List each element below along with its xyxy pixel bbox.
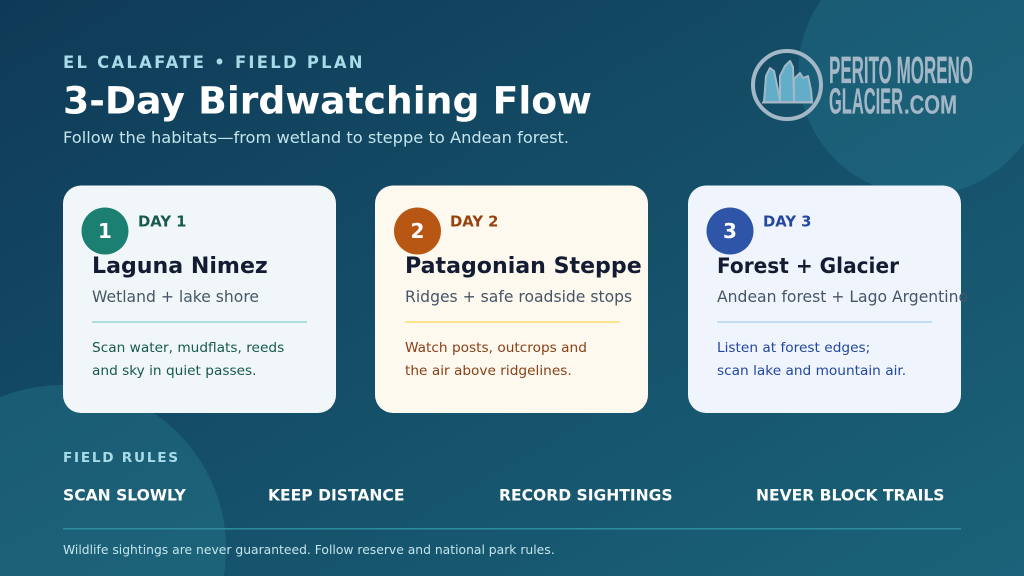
card body: Scan water, mudflats, reeds	[92, 340, 284, 356]
card subtitle: Ridges + safe roadside stops	[405, 288, 632, 306]
footer note: Wildlife sightings are never guaranteed. Follow reserve and national park rules.	[63, 543, 555, 557]
field rules list: SCAN SLOWLY	[63, 486, 186, 504]
card subtitle: Andean forest + Lago Argentino	[717, 288, 968, 306]
card body: the air above ridgelines.	[405, 363, 572, 379]
logo: Perito Moreno Glacier	[753, 50, 973, 122]
field rules list: RECORD SIGHTINGS	[499, 486, 673, 504]
badge 1	[82, 208, 128, 254]
card body: Listen at forest edges;	[717, 340, 870, 356]
panel: day 3	[688, 186, 968, 413]
day label: DAY 1	[138, 214, 186, 230]
field rules list: NEVER BLOCK TRAILS	[756, 486, 944, 504]
badge 2: 2	[411, 219, 424, 243]
card subtitle: Wetland + lake shore	[92, 288, 259, 306]
field rules heading: FIELD RULES	[63, 450, 180, 466]
card heading: Patagonian Steppe	[405, 253, 642, 279]
card heading: Laguna Nimez	[92, 253, 268, 279]
card body: Watch posts, outcrops and	[405, 340, 587, 356]
eyebrow: EL CALAFATE • FIELD PLAN	[63, 53, 365, 72]
card background	[688, 186, 961, 413]
badge 1: 1	[98, 219, 112, 243]
title: 3-Day Birdwatching Flow	[63, 78, 592, 122]
icon: glacier in ring	[753, 51, 821, 119]
card body: scan lake and mountain air.	[717, 363, 906, 379]
logo wordmark domain: .COM	[904, 90, 957, 120]
card background	[63, 186, 336, 413]
card body: and sky in quiet passes.	[92, 363, 256, 379]
day label: DAY 2	[450, 214, 498, 230]
panel: day 1	[63, 186, 336, 413]
day label: DAY 3	[763, 214, 811, 230]
card background	[375, 186, 648, 413]
badge 2	[394, 208, 441, 254]
badge 3: 3	[723, 219, 737, 243]
divider	[717, 321, 932, 323]
field rules list: KEEP DISTANCE	[268, 486, 404, 504]
divider	[92, 321, 307, 323]
badge 3	[706, 208, 754, 254]
divider	[405, 321, 620, 323]
logo: Perito Moreno Glacier: GLACIER	[829, 80, 903, 122]
subtitle: Follow the habitats—from wetland to steppe to Andean forest.	[63, 128, 569, 147]
card heading: Forest + Glacier	[717, 254, 900, 278]
field rules list	[63, 486, 944, 504]
panel: day 2	[375, 186, 648, 413]
